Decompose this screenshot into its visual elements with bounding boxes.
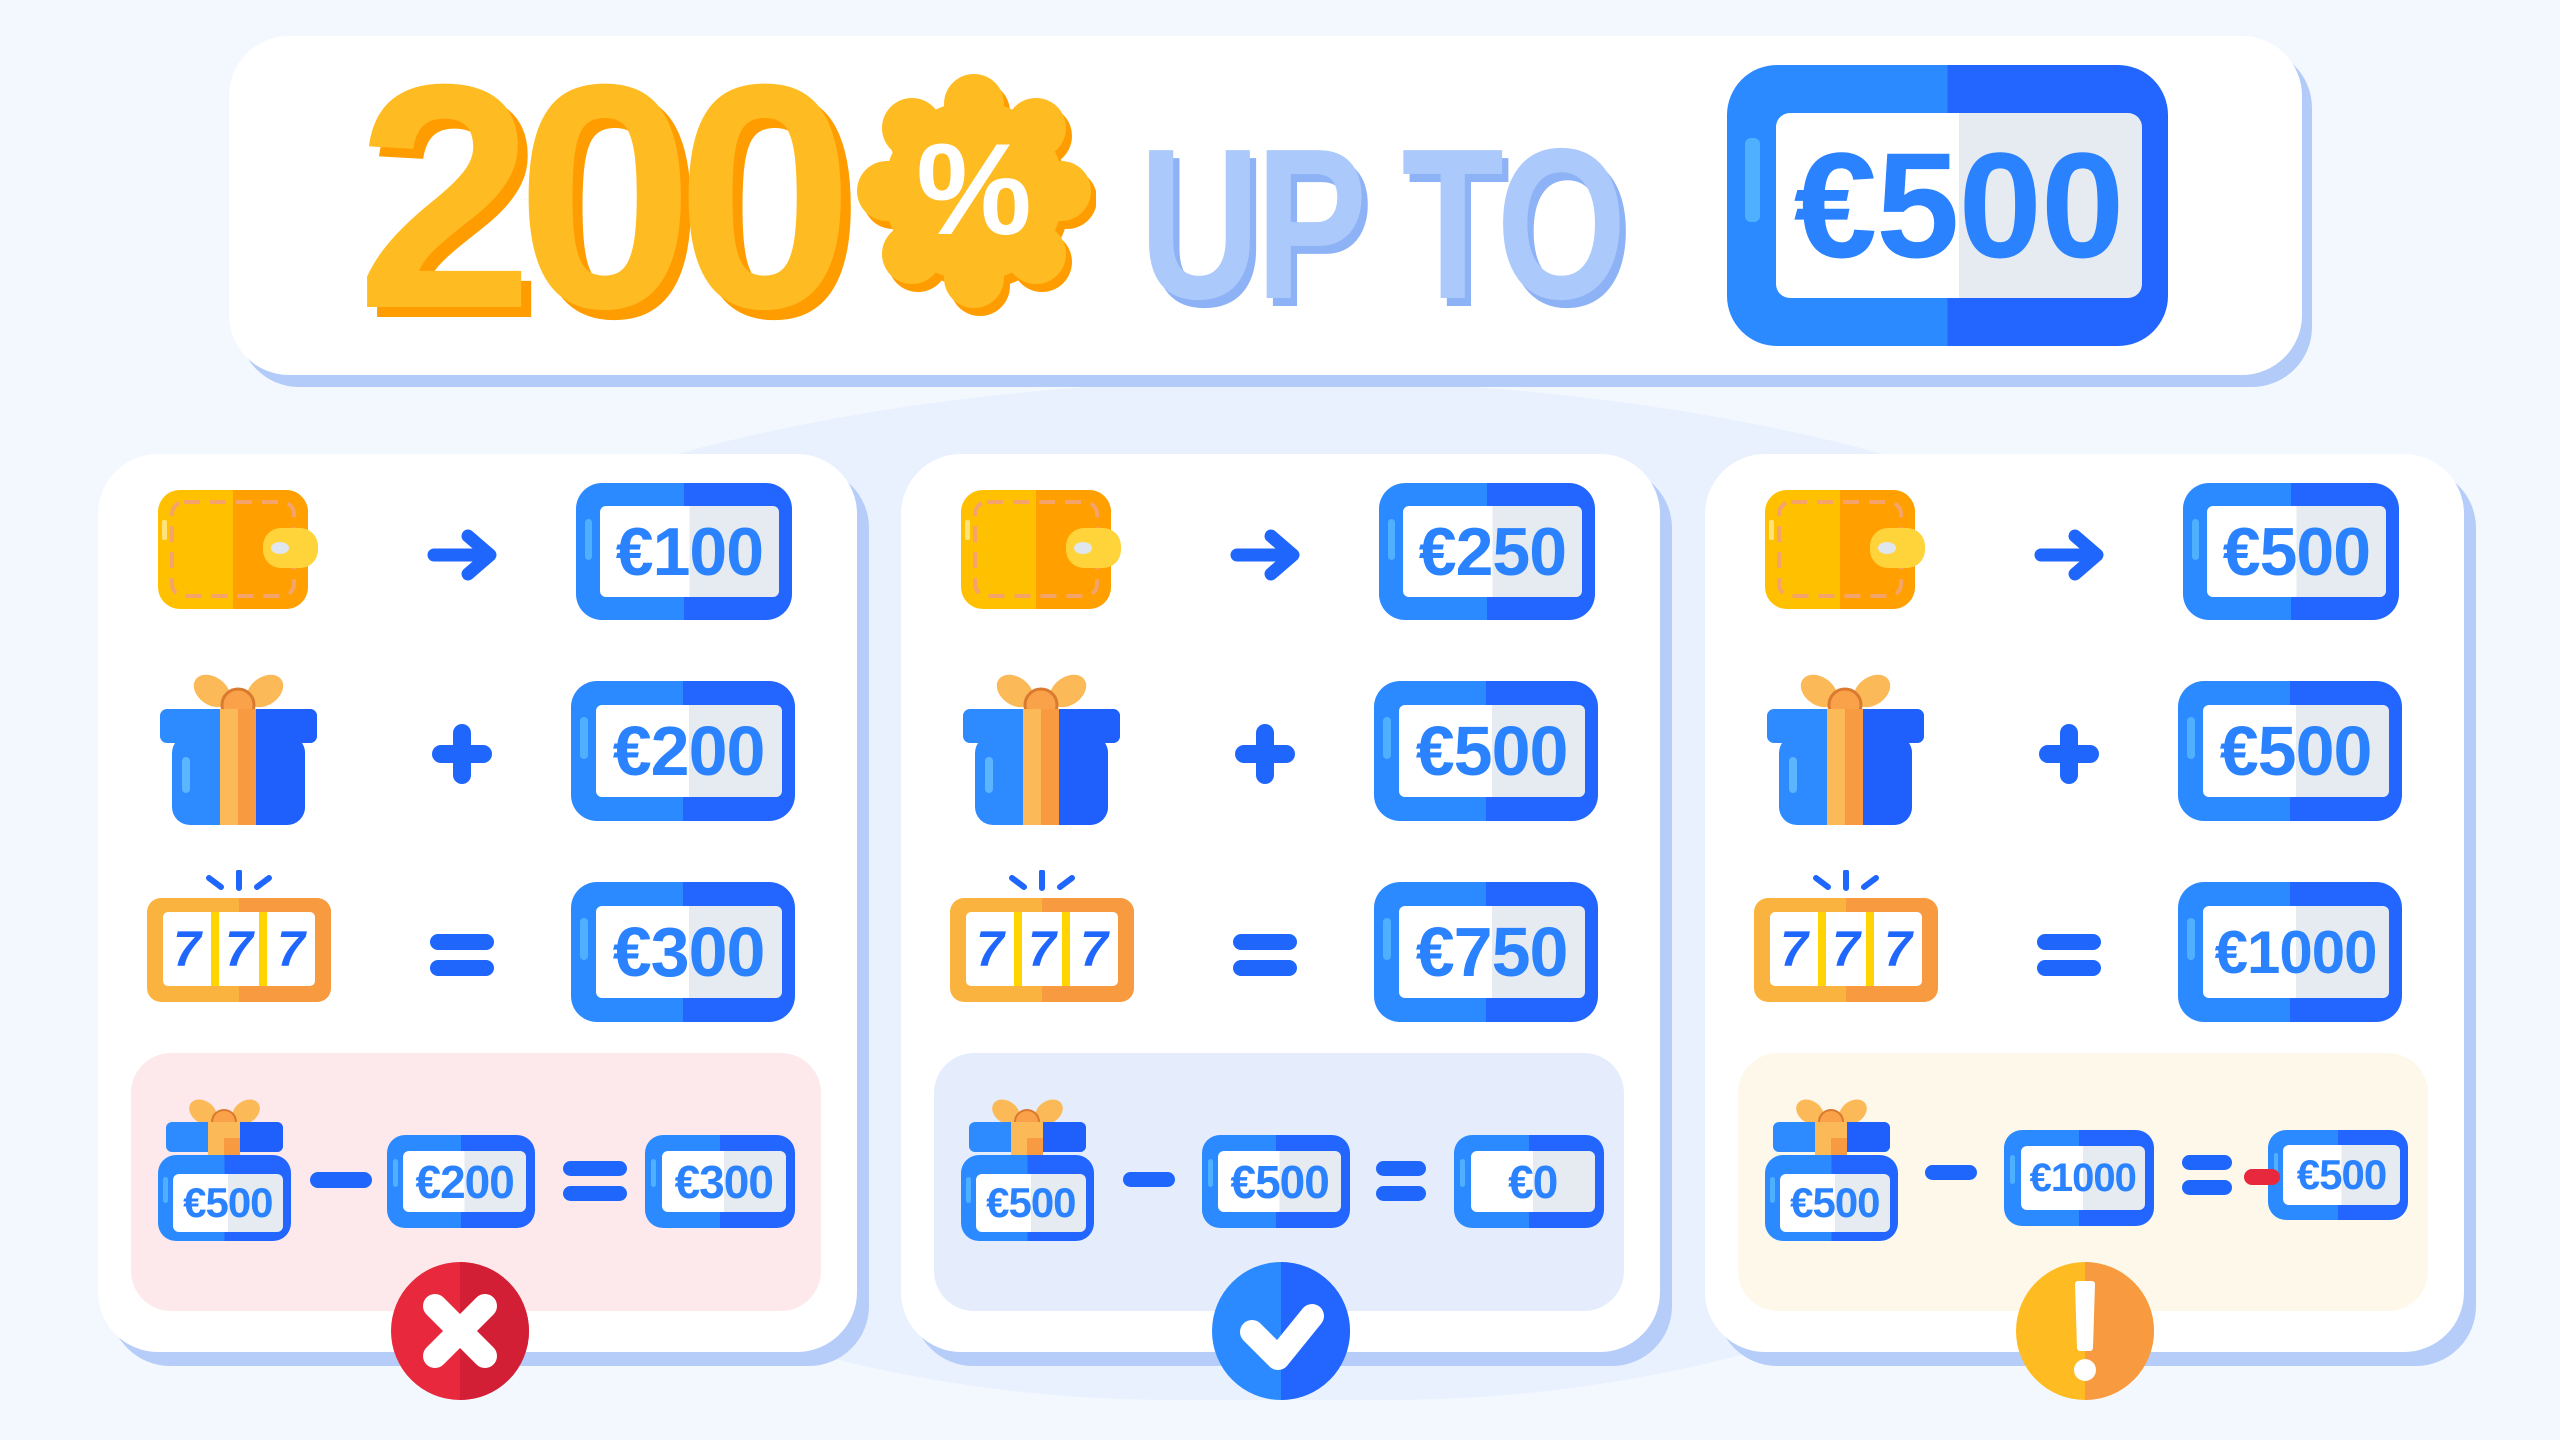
icon: slot machine: 7 (277, 921, 307, 977)
red minus sign (2244, 1169, 2280, 1185)
equals (2037, 934, 2101, 976)
icon: gift (963, 674, 1120, 825)
badge: €300 small (645, 1135, 795, 1228)
badge: €500: €500 (1794, 121, 2123, 289)
badge: €1000 (2178, 882, 2402, 1022)
icon: gift with €500: €500 (1790, 1179, 1880, 1226)
icon: slot machine: 7 (225, 921, 255, 977)
badge: €0 small: €0 (1508, 1156, 1557, 1208)
badge: €500 small (1202, 1135, 1350, 1228)
icon: percent burst: % (916, 116, 1032, 262)
badge: €0 small (1454, 1135, 1604, 1228)
icon: slot machine: 7 (1080, 921, 1110, 977)
badge: €250 (1379, 483, 1595, 620)
icon: wallet (1765, 490, 1925, 609)
icon: percent burst (857, 74, 1096, 316)
icon: slot machine: 7 (1832, 921, 1862, 977)
title: 200%: 200 (356, 17, 836, 375)
panel: €100 deposit (98, 454, 857, 1352)
icon: slot machine (950, 870, 1134, 1002)
minus (310, 1172, 372, 1188)
icon: slot machine: 7 (976, 921, 1006, 977)
arrow (428, 530, 496, 580)
equals (2182, 1155, 2232, 1195)
badge: €1000 small (2004, 1130, 2154, 1226)
badge: €500 (2183, 483, 2399, 620)
icon: red cross (391, 1262, 529, 1400)
panel: €500 deposit (1705, 454, 2464, 1352)
badge: €500: €500 (2223, 514, 2370, 590)
icon: slot machine: 7 (1028, 921, 1058, 977)
badge: €500 small: €500 (1231, 1156, 1329, 1208)
badge: -€500 small (2268, 1130, 2408, 1220)
badge: €750: €750 (1416, 913, 1567, 991)
panel: €250 deposit (901, 454, 1660, 1352)
badge: €300 small: €300 (675, 1156, 773, 1208)
equals (430, 934, 494, 976)
badge: €250: €250 (1419, 514, 1566, 590)
badge: €300 (571, 882, 795, 1022)
icon: gift with €500 (961, 1100, 1094, 1241)
badge: €500 (1727, 65, 2168, 346)
badge: €500 bonus: €500 (2220, 712, 2371, 790)
icon: wallet (961, 490, 1121, 609)
title: UP TO: UP TO (1139, 103, 1622, 344)
badge: -€500 small: €500 (2297, 1151, 2386, 1198)
badge: €1000 small: €1000 (2030, 1156, 2136, 1200)
bottom equation box (131, 1053, 821, 1311)
badge: €1000: €1000 (2215, 918, 2377, 986)
badge: €750 (1374, 882, 1598, 1022)
equals (1376, 1161, 1426, 1201)
badge: €200 small (387, 1135, 535, 1228)
icon: slot machine: 7 (1884, 921, 1914, 977)
badge: €500 bonus (2178, 681, 2402, 821)
icon: gift with €500: €500 (183, 1179, 273, 1226)
icon: gift (1767, 674, 1924, 825)
plus (1235, 724, 1295, 784)
badge: €100: €100 (616, 514, 763, 590)
badge: €500: €500 (1416, 712, 1567, 790)
badge: €500 (1374, 681, 1598, 821)
title: 200% (356, 17, 1096, 375)
icon: gift with €500 (1765, 1100, 1898, 1241)
badge: €200: €200 (613, 712, 764, 790)
icon: slot machine (147, 870, 331, 1002)
header card (229, 36, 2302, 375)
icon: slot machine: 7 (1780, 921, 1810, 977)
arrow (1230, 530, 1300, 580)
background blob (230, 380, 2330, 1400)
icon: gift with €500: €500 (986, 1179, 1076, 1226)
badge: €200 small: €200 (416, 1156, 514, 1208)
icon: slot machine (1754, 870, 1938, 1002)
equals (1233, 934, 1297, 976)
badge: €300: €300 (613, 913, 764, 991)
badge: €200 (571, 681, 795, 821)
bottom equation box (934, 1053, 1624, 1311)
icon: gift with €500 (158, 1100, 291, 1241)
arrow (2034, 530, 2104, 580)
plus (432, 724, 492, 784)
icon: slot machine: 7 (173, 921, 203, 977)
bottom equation box (1738, 1053, 2428, 1311)
icon: gift (160, 674, 317, 825)
icon: wallet (158, 490, 318, 609)
icon: blue check (1212, 1262, 1350, 1400)
badge: €100 (576, 483, 792, 620)
minus (1123, 1172, 1175, 1187)
minus (1925, 1165, 1977, 1180)
equals (563, 1161, 627, 1201)
plus (2039, 724, 2099, 784)
icon: warning exclamation (2016, 1262, 2154, 1400)
